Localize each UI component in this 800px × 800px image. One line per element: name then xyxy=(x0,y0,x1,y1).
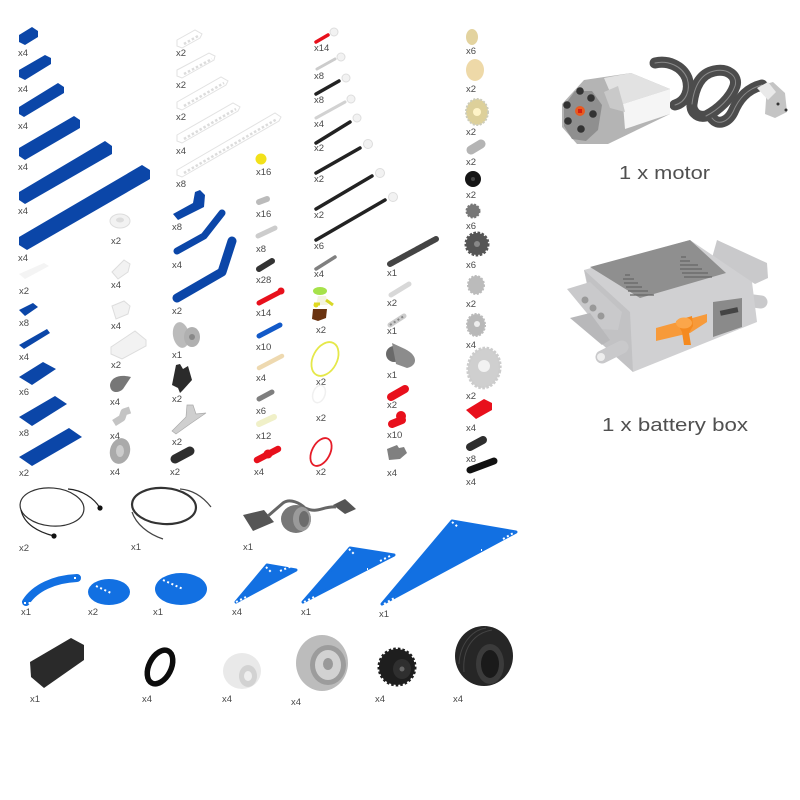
bent beam large: x2 xyxy=(172,306,182,317)
grey bracket xyxy=(110,410,130,442)
axle 2: x14 xyxy=(314,43,329,54)
small liftarm: x1 xyxy=(387,326,397,337)
battery box lid xyxy=(590,240,726,298)
axle 5 xyxy=(314,95,355,130)
yellow ring: x2 xyxy=(316,377,326,388)
motor body xyxy=(562,73,670,144)
white round part: x2 xyxy=(111,236,121,247)
plate 4: x8 xyxy=(19,428,29,439)
plate 1: x8 xyxy=(19,318,29,329)
tan gear: x2 xyxy=(466,84,476,95)
curved panel: x1 xyxy=(21,607,31,618)
dark gear large xyxy=(466,233,488,271)
axle 8 xyxy=(314,140,372,185)
red connector xyxy=(387,389,405,411)
red block: x4 xyxy=(466,423,476,434)
axle 6 xyxy=(314,114,361,154)
axle 2 xyxy=(314,28,338,54)
white slope: x4 xyxy=(111,280,121,291)
axle 12: x6 xyxy=(314,241,324,252)
long black cable with ends xyxy=(18,485,103,554)
beam 6 xyxy=(18,165,150,264)
black wheel gear xyxy=(465,171,481,201)
white brick xyxy=(19,263,49,297)
plate 5: x2 xyxy=(19,468,29,479)
red pin: x14 xyxy=(256,308,271,319)
grey wedge xyxy=(110,376,131,408)
black bracket xyxy=(172,364,192,405)
red cross block xyxy=(387,411,406,441)
plate 2 xyxy=(19,329,50,363)
axle 10: x2 xyxy=(314,210,324,221)
black double pin xyxy=(466,461,494,488)
dark gear large: x6 xyxy=(466,260,476,271)
grey long connector: x8 xyxy=(256,244,266,255)
axle 12 xyxy=(314,192,398,252)
white brick: x2 xyxy=(19,286,29,297)
battery box rear pins xyxy=(712,240,768,302)
white wheel: x4 xyxy=(222,694,232,705)
red pin xyxy=(256,288,284,319)
liftarm 2: x2 xyxy=(176,80,186,91)
big grey gear: x2 xyxy=(466,391,476,402)
panel: tires and wheels xyxy=(30,626,513,708)
red double pin xyxy=(254,449,278,478)
large disc xyxy=(153,573,207,618)
panel: motor xyxy=(562,62,788,183)
tan large gear: x2 xyxy=(466,127,476,138)
plate 5 xyxy=(19,428,82,479)
red ring: x2 xyxy=(316,467,326,478)
orange switch xyxy=(656,314,707,345)
medium triangle: x1 xyxy=(301,607,311,618)
liftarm 3: x2 xyxy=(176,112,186,123)
grey double pulley: x1 xyxy=(172,350,182,361)
liftarm 3 xyxy=(176,77,228,123)
beam 5: x4 xyxy=(18,206,28,217)
black gear rack: x1 xyxy=(387,268,397,279)
black bracket: x2 xyxy=(172,394,182,405)
bent beam large xyxy=(172,241,232,317)
grey angled connector xyxy=(387,445,407,479)
short grey axle xyxy=(314,257,335,280)
black block: x1 xyxy=(30,694,40,705)
black pin xyxy=(466,440,483,465)
minifigure xyxy=(312,287,333,336)
coiled power cable xyxy=(243,499,356,553)
red connector: x2 xyxy=(387,400,397,411)
motor label: 1 x motor xyxy=(619,163,710,183)
grey short connector: x16 xyxy=(256,209,271,220)
beam 3: x4 xyxy=(18,121,28,132)
white wheel xyxy=(222,653,261,705)
battery box body xyxy=(584,240,757,372)
grey gear: x2 xyxy=(466,299,476,310)
grey gear medium xyxy=(466,314,485,351)
minifigure: x2 xyxy=(316,325,326,336)
cable plug xyxy=(757,82,788,118)
red cross block: x10 xyxy=(387,430,402,441)
beam 2 xyxy=(18,55,51,95)
yellow stud: x16 xyxy=(256,167,271,178)
white round part xyxy=(110,214,130,247)
grey short connector xyxy=(256,199,271,220)
black pin: x28 xyxy=(256,275,271,286)
bent beam small xyxy=(172,190,205,233)
blue pin xyxy=(256,325,280,353)
white slope xyxy=(111,260,130,291)
tan pin: x4 xyxy=(256,373,266,384)
beam 4 xyxy=(18,116,80,173)
grey wheel disc xyxy=(107,436,133,478)
axle 6: x2 xyxy=(314,143,324,154)
big grey gear xyxy=(465,346,503,402)
battery connector xyxy=(713,298,742,337)
coiled power cable: x1 xyxy=(243,542,253,553)
light axle pin: x2 xyxy=(387,298,397,309)
beam 4: x4 xyxy=(18,162,28,173)
tan large gear xyxy=(466,99,488,138)
liftarm 4: x4 xyxy=(176,146,186,157)
pale pin: x12 xyxy=(256,431,271,442)
black wheel gear: x2 xyxy=(466,190,476,201)
grey differential hub xyxy=(386,343,415,381)
grey angled connector: x4 xyxy=(387,468,397,479)
red ring xyxy=(306,435,336,478)
axle 4: x8 xyxy=(314,95,324,106)
black double pin: x4 xyxy=(466,477,476,488)
white brick: x2 xyxy=(111,360,121,371)
panel: gears column xyxy=(465,29,503,488)
white brick xyxy=(111,331,146,371)
panel: connectors column xyxy=(386,239,436,479)
dark connector xyxy=(170,451,190,478)
tan gear xyxy=(466,59,484,95)
dark grey gear xyxy=(466,204,480,232)
yellow ring xyxy=(306,337,344,388)
bent beam medium: x4 xyxy=(172,260,182,271)
large triangle xyxy=(379,521,516,620)
tan pin xyxy=(256,356,282,384)
small disc: x2 xyxy=(88,607,98,618)
axle 4 xyxy=(314,74,350,106)
black knobby tire xyxy=(375,649,415,705)
large disc: x1 xyxy=(153,607,163,618)
bent beam small: x8 xyxy=(172,222,182,233)
beam 1 xyxy=(18,27,38,59)
small triangle: x4 xyxy=(232,607,242,618)
beam 2: x4 xyxy=(18,84,28,95)
black rubber ring xyxy=(142,646,178,705)
axle 10 xyxy=(314,168,384,221)
black gear rack xyxy=(387,239,436,279)
axle 5: x4 xyxy=(314,119,324,130)
grey long connector xyxy=(256,228,275,255)
axle 3: x8 xyxy=(314,71,324,82)
blue pin: x10 xyxy=(256,342,271,353)
black pin: x8 xyxy=(466,454,476,465)
long black cable with ends: x2 xyxy=(19,543,29,554)
panel: axles column xyxy=(306,28,398,478)
plate 3 xyxy=(19,362,56,398)
grey wheel xyxy=(291,635,348,708)
axle 8: x2 xyxy=(314,174,324,185)
grey pin: x6 xyxy=(256,406,266,417)
beam 3 xyxy=(18,83,64,132)
grey differential hub: x1 xyxy=(387,370,397,381)
grey triangle bracket: x2 xyxy=(172,437,182,448)
panel: cables xyxy=(18,485,356,554)
curved panel xyxy=(21,577,77,618)
yellow stud xyxy=(256,154,271,178)
red block xyxy=(466,399,492,434)
black knobby tire: x4 xyxy=(375,694,385,705)
tan gear small xyxy=(466,29,478,57)
liftarm 5: x8 xyxy=(176,179,186,190)
white connector xyxy=(111,301,130,332)
panel: battery box xyxy=(567,240,768,435)
tan gear small: x6 xyxy=(466,46,476,57)
beam 5 xyxy=(18,141,112,217)
grey pin xyxy=(256,392,272,417)
thick black cable xyxy=(131,486,211,553)
black rubber ring: x4 xyxy=(142,694,152,705)
axle 3 xyxy=(314,53,345,82)
plate 3: x6 xyxy=(19,387,29,398)
grey gear medium: x4 xyxy=(466,340,476,351)
motor cable xyxy=(655,62,762,122)
white ring: x2 xyxy=(316,413,326,424)
dark connector: x2 xyxy=(170,467,180,478)
white connector: x4 xyxy=(111,321,121,332)
beam 6: x4 xyxy=(18,253,28,264)
grey wheel disc: x4 xyxy=(110,467,120,478)
red double pin: x4 xyxy=(254,467,264,478)
large triangle: x1 xyxy=(379,609,389,620)
grey triangle bracket xyxy=(172,405,206,448)
small disc xyxy=(88,579,130,618)
white ring xyxy=(310,383,328,424)
pale pin xyxy=(256,417,274,442)
grey worm gear: x2 xyxy=(466,157,476,168)
light axle pin xyxy=(387,284,409,309)
liftarm 1: x2 xyxy=(176,48,186,59)
liftarm 1 xyxy=(176,30,202,59)
grey wedge: x4 xyxy=(110,397,120,408)
dark grey gear: x6 xyxy=(466,221,476,232)
small triangle xyxy=(232,565,296,618)
big black tire: x4 xyxy=(453,694,463,705)
liftarm 4 xyxy=(176,103,240,157)
liftarm 5 xyxy=(176,113,281,190)
plate 2: x4 xyxy=(19,352,29,363)
black pin xyxy=(256,261,272,286)
grey gear xyxy=(466,276,484,310)
grey wheel: x4 xyxy=(291,697,301,708)
liftarm 2 xyxy=(176,53,215,91)
panel: white liftarms xyxy=(176,30,281,190)
panel: pins column xyxy=(254,154,284,478)
battery box left connectors xyxy=(567,282,622,361)
grey worm gear xyxy=(466,144,481,168)
panel: blue bent beams and grey parts xyxy=(170,190,232,478)
beam 1: x4 xyxy=(18,48,28,59)
bent beam medium xyxy=(172,213,222,271)
plate 1 xyxy=(19,303,38,329)
big black tire xyxy=(453,626,513,705)
panel: blue beams column xyxy=(18,27,150,479)
panel: blue flat panels xyxy=(21,521,516,620)
plate 4 xyxy=(19,396,67,439)
black block xyxy=(30,638,84,705)
grey double pulley xyxy=(171,321,200,361)
short grey axle: x4 xyxy=(314,269,324,280)
small liftarm xyxy=(387,316,404,337)
thick black cable: x1 xyxy=(131,542,141,553)
battery label: 1 x battery box xyxy=(602,415,748,435)
panel: small parts column xyxy=(107,214,146,478)
grey bracket: x4 xyxy=(110,431,120,442)
medium triangle xyxy=(301,548,394,618)
